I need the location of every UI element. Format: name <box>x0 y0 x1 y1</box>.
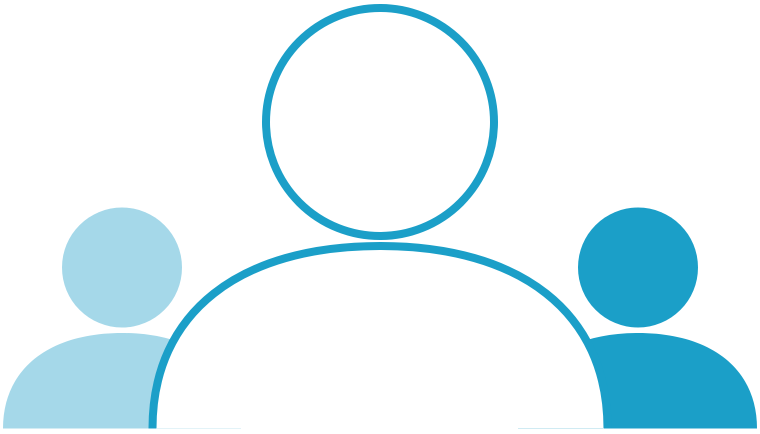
icon: centre person (outlined) <box>152 8 608 428</box>
faint baseline under right of centre person <box>518 428 604 429</box>
faint baseline under left of centre person <box>157 428 241 429</box>
icon: right person (solid blue) <box>519 208 757 428</box>
icon: left person (light blue) <box>3 208 241 428</box>
